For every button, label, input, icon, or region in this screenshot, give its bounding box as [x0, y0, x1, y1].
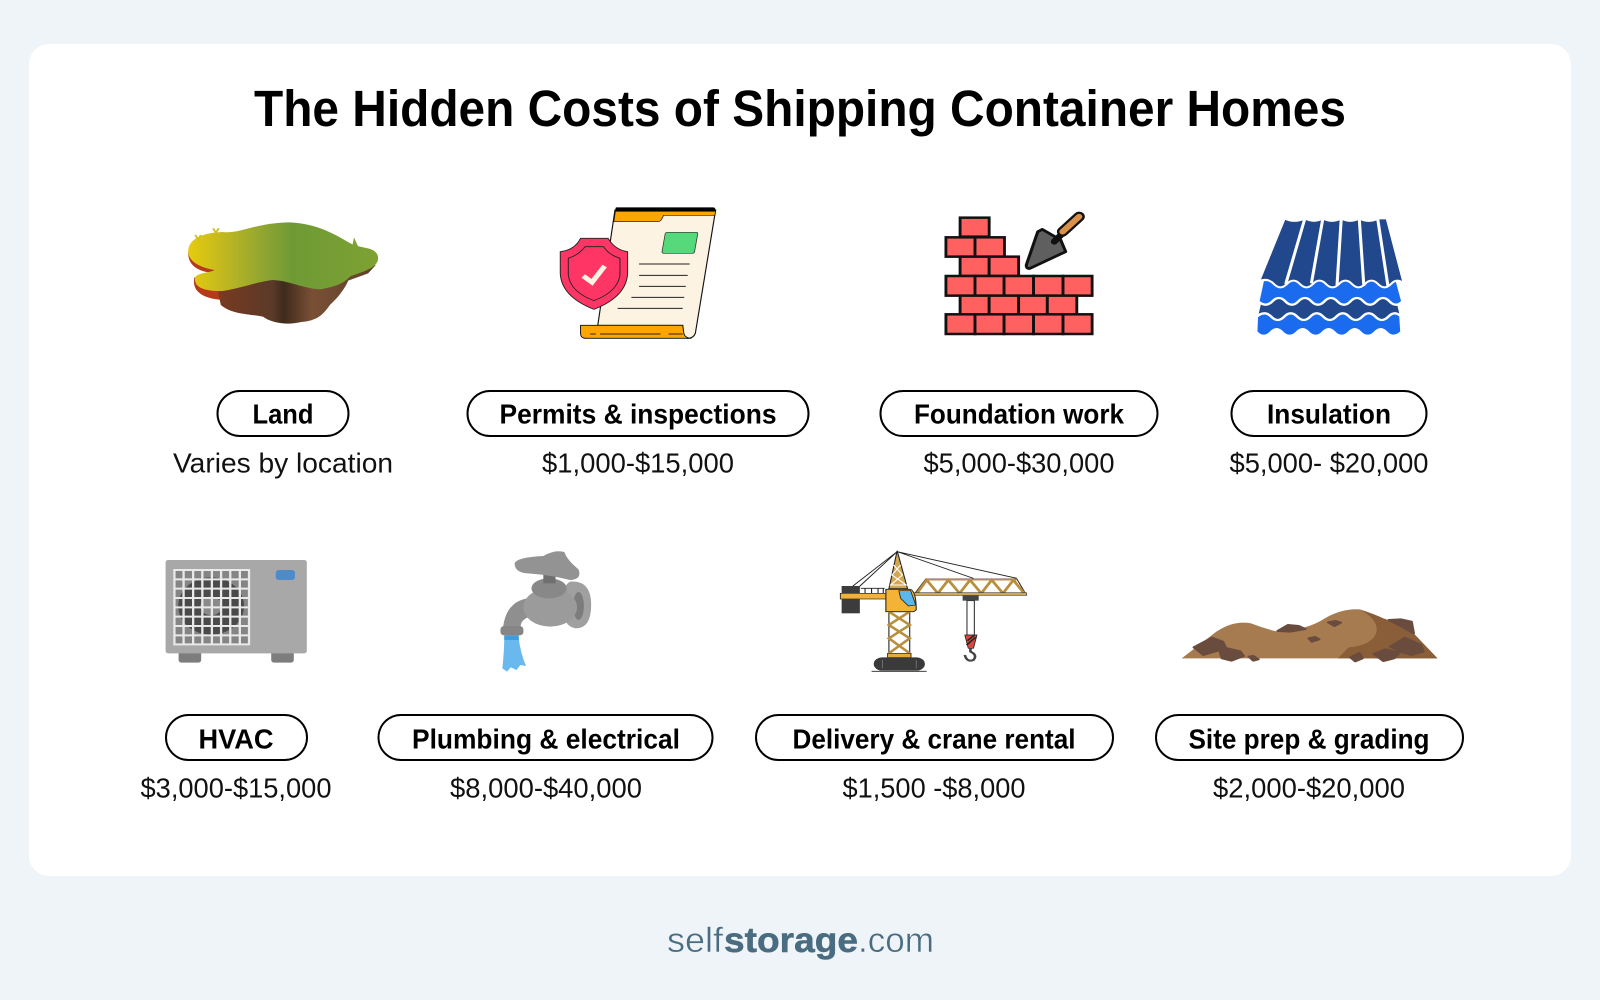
pill: Site prep: Site prep & grading	[1188, 724, 1430, 754]
icon: dirt pile	[1182, 609, 1438, 661]
item: Land	[173, 222, 393, 479]
item: Site prep	[1156, 609, 1463, 804]
item: Delivery	[756, 551, 1113, 804]
item: HVAC	[140, 560, 332, 804]
pill: Site prep	[1156, 715, 1463, 760]
icon: tower crane	[840, 551, 1026, 671]
pill: HVAC: HVAC	[198, 724, 274, 754]
pill: Permits	[468, 391, 808, 436]
logo: selfstorage.com	[667, 921, 934, 960]
value: HVAC: $3,000-$15,000	[140, 772, 332, 804]
pill: Delivery	[756, 715, 1113, 760]
icon: bricks and trowel	[946, 217, 1092, 334]
pill: Permits: Permits & inspections	[500, 398, 776, 430]
pill: Land	[218, 391, 348, 436]
icon: HVAC outdoor unit	[166, 560, 307, 663]
pill: Plumbing	[378, 715, 712, 760]
value: Insulation: $5,000- $20,000	[1230, 448, 1428, 478]
icon: faucet	[500, 551, 591, 672]
logo: selfstorage.com: self	[667, 921, 723, 960]
pill: Foundation	[880, 391, 1158, 436]
item: Permits	[468, 207, 808, 478]
value: Delivery: $1,500 -$8,000	[842, 772, 1026, 804]
icon: land island	[188, 222, 378, 324]
value: Plumbing: $8,000-$40,000	[450, 772, 642, 804]
pill: Delivery: Delivery & crane rental	[792, 724, 1076, 754]
value: Site prep: $2,000-$20,000	[1213, 772, 1405, 804]
pill: Insulation: Insulation	[1267, 398, 1391, 430]
value: Permits: $1,000-$15,000	[542, 448, 734, 478]
pill: Land: Land	[252, 398, 314, 430]
item: Plumbing	[378, 551, 712, 804]
logo: selfstorage.com: .com	[858, 921, 934, 960]
pill: HVAC	[166, 715, 307, 760]
pill: Plumbing: Plumbing & electrical	[412, 724, 680, 754]
icon: insulation sheets	[1257, 218, 1404, 335]
title: The Hidden Costs of Shipping Container Homes	[254, 80, 1346, 137]
item: Insulation	[1230, 218, 1428, 478]
value: Foundation: $5,000-$30,000	[924, 448, 1114, 478]
value: Land: Varies by location	[173, 448, 393, 478]
item: Foundation	[880, 217, 1158, 478]
logo: selfstorage.com: storage	[724, 921, 858, 960]
icon: permit document and shield	[560, 207, 716, 338]
pill: Insulation	[1232, 391, 1426, 436]
pill: Foundation: Foundation work	[914, 398, 1124, 430]
